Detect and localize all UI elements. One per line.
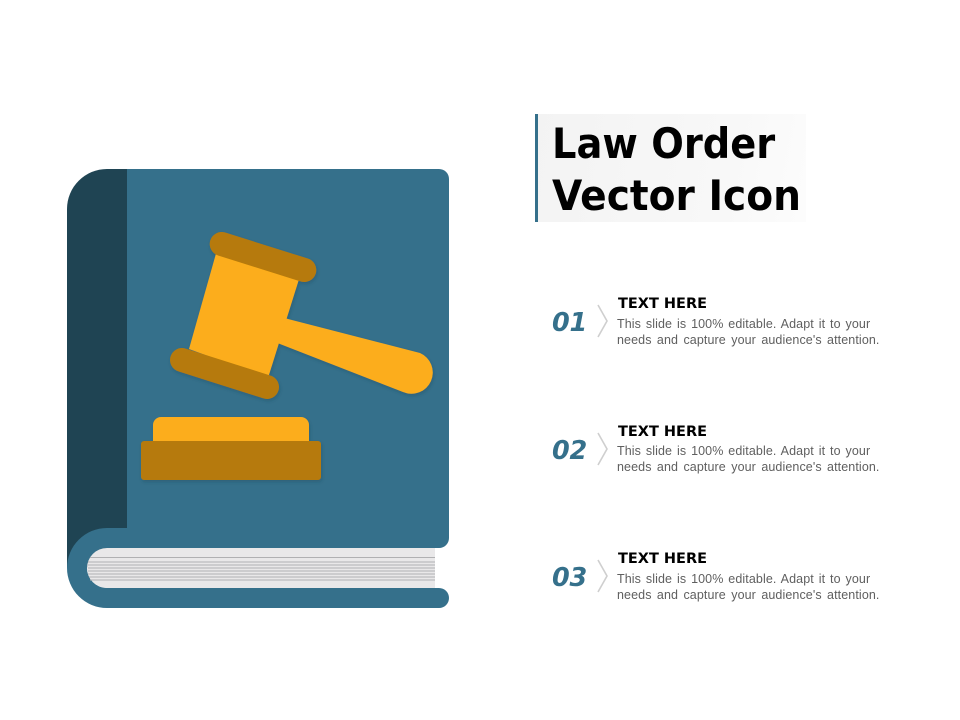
- body 02: [617, 444, 880, 474]
- title accent bar: [535, 114, 538, 222]
- gavel head: [189, 250, 300, 378]
- icon: sound block: [141, 417, 321, 480]
- gavel handle: [262, 314, 433, 394]
- body 03: This slide is 100% editable. Adapt it to your: [617, 572, 870, 586]
- book pages: [87, 548, 435, 588]
- title text: Law Order: [552, 119, 775, 168]
- title text: Vector Icon: [552, 171, 801, 220]
- body 01: [617, 317, 880, 347]
- chevron 03: [598, 560, 608, 592]
- chevron 01: [598, 304, 608, 338]
- block base: [141, 441, 321, 480]
- heading 03: TEXT HERE: [618, 551, 707, 567]
- title text: [552, 119, 801, 220]
- number 01: 01: [552, 308, 587, 338]
- body 01: needs and capture your audience's attention.: [617, 333, 880, 347]
- title panel: [535, 114, 806, 222]
- book spine: [67, 169, 127, 568]
- chevron 02: [598, 432, 608, 466]
- heading 02: TEXT HERE: [618, 424, 707, 440]
- item 01: [552, 296, 880, 347]
- book cover: [67, 169, 449, 608]
- gavel bottom band: [182, 360, 267, 387]
- icon: gavel: [182, 244, 433, 394]
- body 03: [617, 572, 880, 602]
- item 02: [552, 424, 880, 474]
- heading 01: TEXT HERE: [618, 296, 707, 312]
- body 02: needs and capture your audience's attention.: [617, 460, 880, 474]
- body 03: needs and capture your audience's attention.: [617, 588, 880, 602]
- gavel top band: [222, 244, 304, 270]
- number 02: 02: [552, 436, 587, 466]
- number 03: 03: [552, 563, 587, 593]
- block top: [153, 417, 309, 445]
- illustration: law book with gavel: [67, 169, 449, 608]
- body 01: This slide is 100% editable. Adapt it to your: [617, 317, 870, 331]
- item 03: [552, 551, 880, 602]
- body 02: This slide is 100% editable. Adapt it to your: [617, 444, 870, 458]
